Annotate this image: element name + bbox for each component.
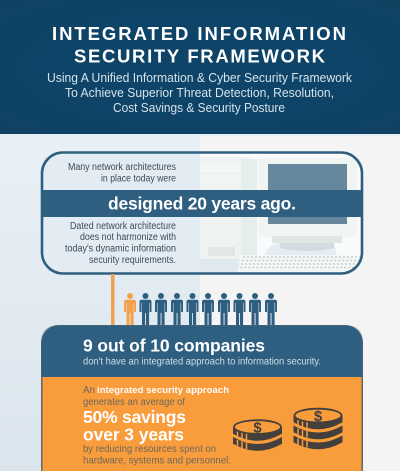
icon: large coin stack xyxy=(294,408,342,449)
top text xyxy=(68,162,176,184)
subtitle: Cost Savings & Security Posture xyxy=(113,100,285,115)
orange savings block: generates an average of xyxy=(83,397,185,408)
band: designed 20 years ago xyxy=(41,190,363,217)
band: 9 out of 10 xyxy=(41,325,363,377)
panel outline xyxy=(42,326,362,471)
bottom text: security requirements. xyxy=(89,255,176,266)
title xyxy=(52,23,346,66)
band: 9 out of 10: 9 out of 10 companies xyxy=(83,336,265,356)
subtitle: To Achieve Superior Threat Detection, Resolution, xyxy=(65,85,334,100)
orange savings block: An xyxy=(83,385,95,396)
icons: ten people, one highlighted xyxy=(124,293,277,326)
orange savings block xyxy=(41,377,363,471)
connector line xyxy=(111,274,114,326)
bottom text: today's dynamic information xyxy=(65,244,176,254)
top text: Many network architectures xyxy=(68,162,176,173)
orange savings block: over 3 years xyxy=(83,424,184,444)
panel: outdated architecture xyxy=(41,152,363,274)
subtitle xyxy=(47,70,352,115)
orange savings block: 50% savings xyxy=(83,407,186,427)
subtitle: Using A Unified Information & Cyber Security Framework xyxy=(47,70,352,85)
header banner xyxy=(0,0,400,134)
orange savings block: hardware, systems and personnel. xyxy=(83,456,231,466)
title: SECURITY FRAMEWORK xyxy=(74,46,326,66)
band: designed 20 years ago: designed 20 years ago. xyxy=(108,194,296,214)
top text: in place today were xyxy=(101,174,176,184)
orange savings block: integrated security approach xyxy=(97,385,229,396)
page background xyxy=(0,134,400,471)
bottom text: does not harmonize with xyxy=(80,232,176,243)
icon: small coin stack: $ xyxy=(253,420,262,436)
icon: small coin stack xyxy=(233,420,282,451)
bottom text xyxy=(65,221,176,266)
band: 9 out of 10: don't have an integrated approach to information security. xyxy=(83,356,321,368)
bottom text: Dated network architecture xyxy=(70,221,176,232)
panel: statistics xyxy=(41,325,363,471)
image: old computer xyxy=(200,153,362,273)
orange savings block: by reducing resources spent on xyxy=(83,444,216,455)
title: INTEGRATED INFORMATION xyxy=(52,23,346,44)
icon: large coin stack: $ xyxy=(314,408,323,425)
